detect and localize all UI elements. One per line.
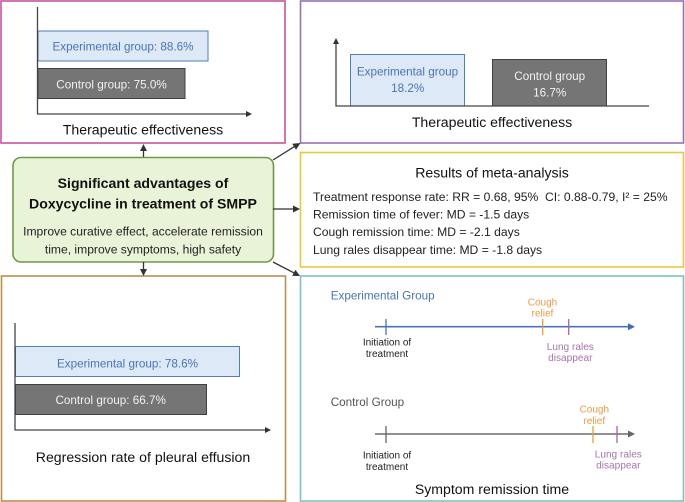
panel: therapeutic effectiveness vertical bars xyxy=(300,1,684,143)
panel: regression rate of pleural effusion xyxy=(2,276,286,501)
heading: significant advantages: Significant advantages of xyxy=(58,175,229,191)
bar: control group 66.7% xyxy=(16,384,206,414)
timeline: control group: Cough xyxy=(580,405,609,416)
timeline: control group xyxy=(331,396,642,473)
heading: therapeutic effectiveness: Therapeutic effectiveness xyxy=(412,114,572,130)
heading: symptom remission time: Symptom remission time xyxy=(415,481,569,497)
timeline: control group: relief xyxy=(583,416,605,427)
panel: central conclusion xyxy=(13,158,274,262)
heading: therapeutic effectiveness: Therapeutic effectiveness xyxy=(63,122,223,138)
bar: experimental group 18.2% xyxy=(350,54,464,106)
timeline: control group: treatment xyxy=(366,462,408,473)
timeline: control group: disappear xyxy=(596,461,641,472)
arrowhead: x axis xyxy=(246,111,252,117)
arrowhead: x axis xyxy=(265,427,271,433)
timeline: control group: Lung rales xyxy=(595,449,642,460)
bar: control group 16.7% xyxy=(492,60,606,106)
bar: control group 16.7%: Control group xyxy=(514,70,586,83)
timeline: experimental group: Cough xyxy=(528,297,557,308)
bar: experimental group 88.6% xyxy=(38,31,208,61)
arrow: to meta-analysis panel xyxy=(273,206,300,212)
text: summary: Improve curative effect, accelerate remission xyxy=(23,224,263,238)
bar: control group 75.0%: Control group: 75.0% xyxy=(56,78,167,92)
timeline: experimental group: treatment xyxy=(366,349,408,360)
timeline: control group: Initiation of xyxy=(363,450,411,461)
heading: regression rate: Regression rate of pleural effusion xyxy=(36,449,250,465)
heading: significant advantages: Doxycycline in treatment of SMPP xyxy=(29,196,257,212)
arrow: to bottom-right panel xyxy=(273,262,300,276)
chart axes xyxy=(38,7,246,114)
heading: results of meta-analysis: Results of meta-analysis xyxy=(415,165,569,181)
bar: control group 66.7%: Control group: 66.7% xyxy=(55,394,166,407)
bar: experimental group 78.6% xyxy=(16,346,240,376)
timeline: experimental group xyxy=(331,289,635,364)
arrow: to top-left panel xyxy=(140,144,147,157)
panel: symptom remission time xyxy=(300,276,684,501)
arrowhead: y axis xyxy=(333,38,339,44)
timeline: experimental group: Lung rales xyxy=(547,342,594,353)
text: meta-analysis statistics: Cough remission time: MD = -2.1 days xyxy=(313,225,520,239)
bar: control group 16.7%: 16.7% xyxy=(533,87,566,100)
bar: control group 75.0% xyxy=(38,68,185,98)
text: meta-analysis statistics: Lung rales disappear time: MD = -1.8 days xyxy=(313,243,542,257)
arrow: to top-right panel xyxy=(273,143,300,160)
panel: therapeutic effectiveness horizontal bars xyxy=(1,1,285,143)
text: meta-analysis statistics: Remission time of fever: MD = -1.5 days xyxy=(313,208,529,222)
panel: results of meta-analysis xyxy=(300,152,684,267)
bar: experimental group 18.2%: 18.2% xyxy=(391,82,424,95)
timeline: control group: Control Group xyxy=(331,396,405,409)
timeline: experimental group: Experimental Group xyxy=(331,289,435,302)
bar: experimental group 18.2%: Experimental group xyxy=(357,66,459,78)
timeline: experimental group: disappear xyxy=(548,353,593,364)
bar: experimental group 78.6%: Experimental group: 78.6% xyxy=(57,357,198,370)
timeline: experimental group: relief xyxy=(532,309,554,320)
bar: experimental group 88.6%: Experimental group: 88.6% xyxy=(53,41,193,54)
text: meta-analysis statistics: Treatment response rate: RR = 0.68, 95% CI: 0.88-0.79, I² = 25% xyxy=(313,190,668,204)
chart axes xyxy=(336,44,649,106)
text: summary: time, improve symptoms, high safety xyxy=(45,242,242,256)
chart axes xyxy=(15,323,266,430)
arrow: to bottom-left panel xyxy=(140,262,147,276)
timeline: experimental group: Initiation of xyxy=(363,337,411,348)
